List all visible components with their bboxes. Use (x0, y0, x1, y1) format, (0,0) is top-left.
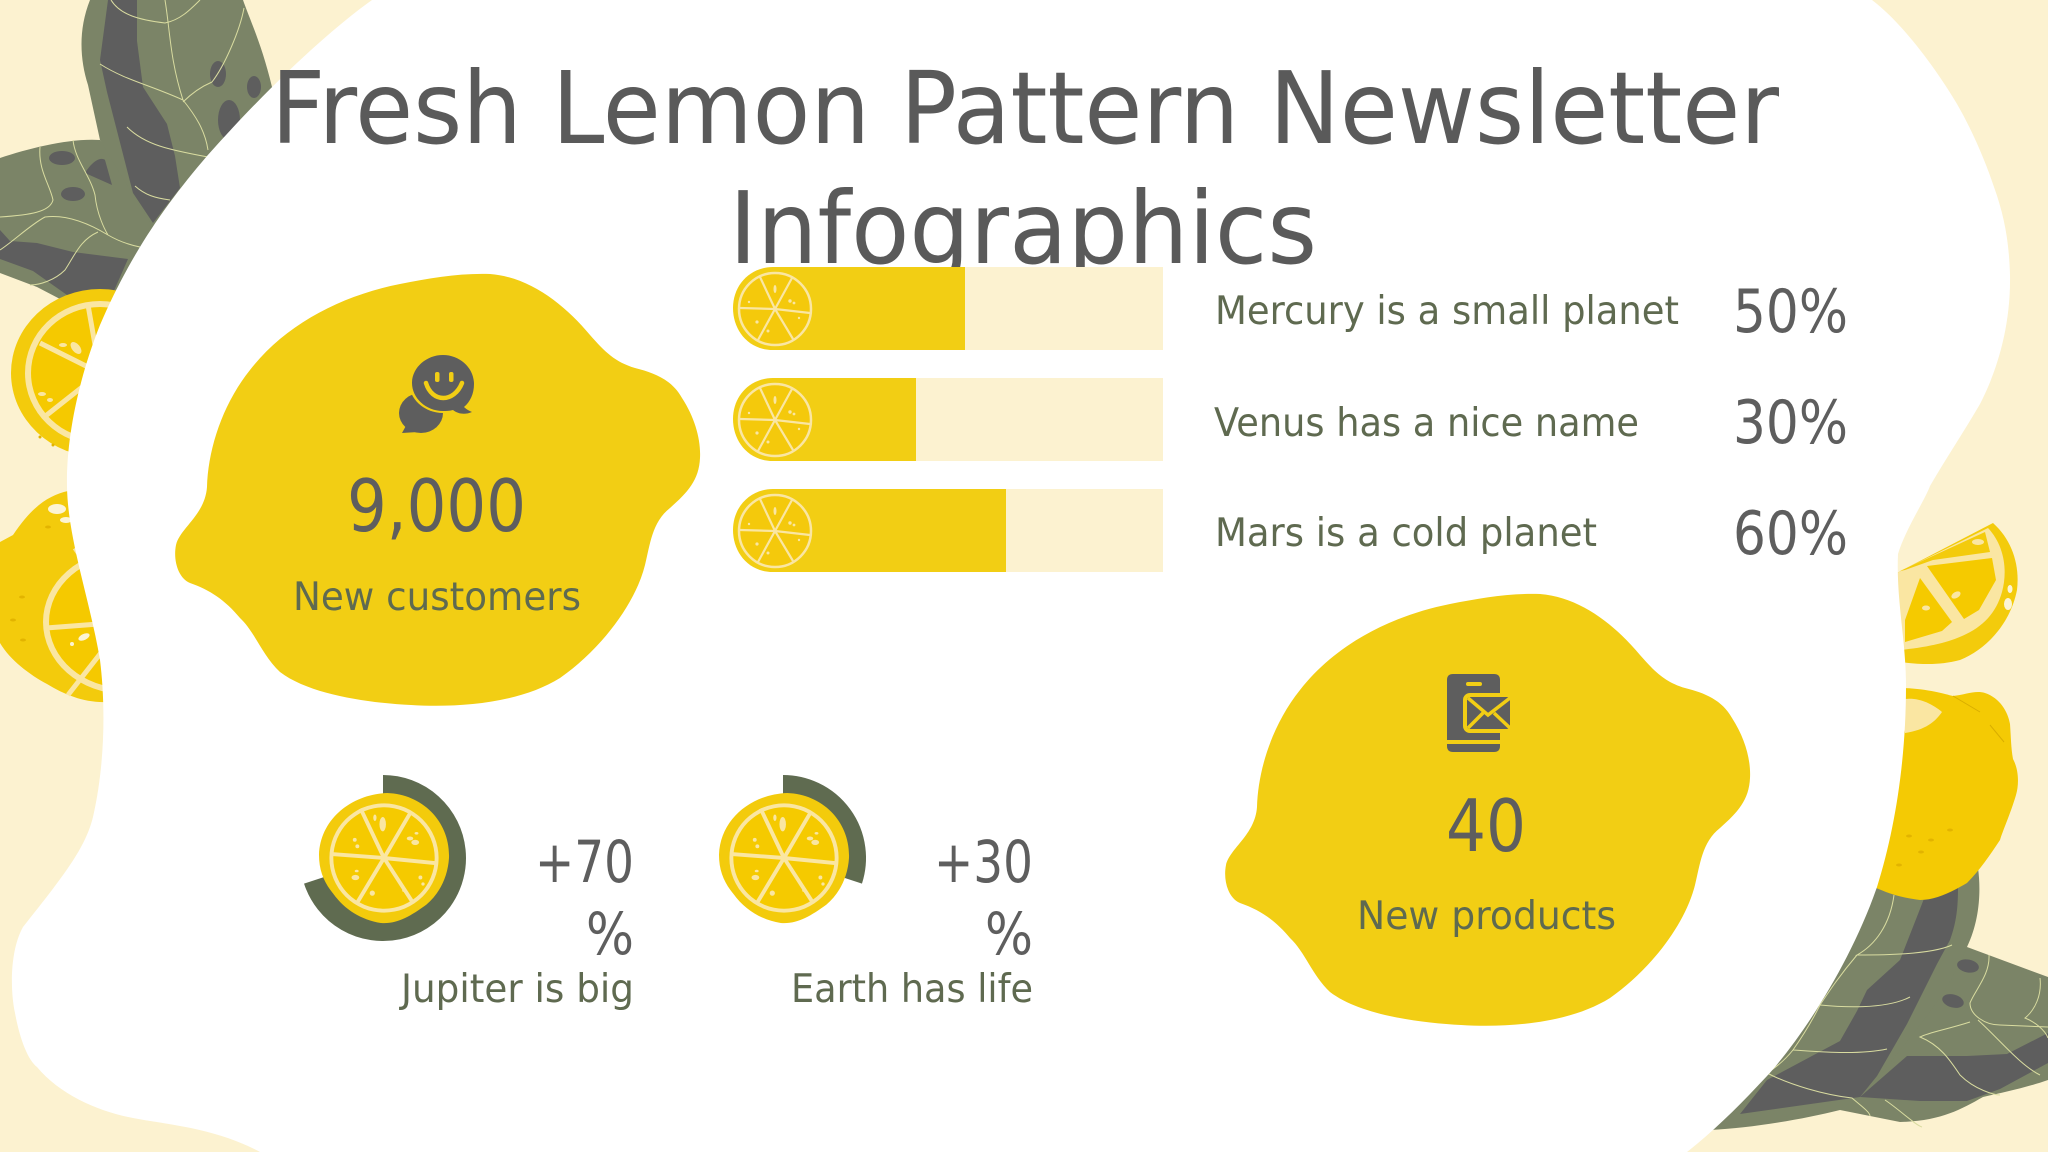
donut: Jupiter 70% (314, 786, 634, 1012)
bar row: Venus 30% (733, 378, 1848, 461)
bar row: Mars 60% (733, 489, 1848, 572)
panel: new customers lemon (175, 274, 700, 706)
icon: smiling chat bubbles (399, 351, 477, 433)
donut: Earth 30% (719, 786, 1033, 1012)
label: Mercury: Mercury is a small planet (1215, 289, 1679, 334)
value: 50%: 50% (1733, 277, 1848, 347)
value: 30%: 30% (1733, 388, 1848, 458)
label: Jupiter: Jupiter is big (398, 967, 634, 1012)
half lemon slice, right (1895, 523, 2018, 664)
top-left lemon leaves (0, 0, 300, 299)
value: 60%: 60% (1733, 499, 1848, 569)
title (280, 67, 1779, 267)
bottom-right lemon leaves (1710, 868, 2048, 1130)
label: Earth: Earth has life (791, 967, 1033, 1012)
title: Infographics (729, 170, 1317, 287)
label: Venus: Venus has a nice name (1214, 401, 1639, 446)
label: new products: New products (1357, 894, 1616, 939)
value: percent sign: % (985, 900, 1033, 968)
panel: new products lemon (1225, 594, 1750, 1026)
lemon slice, left (11, 289, 189, 457)
label: new customers: New customers (293, 575, 581, 620)
half lemon, left (0, 490, 207, 702)
value: +30: +30 (934, 828, 1033, 896)
icon: phone with envelope (1447, 674, 1512, 752)
value: percent sign: % (586, 900, 634, 968)
whole lemon, right (1870, 688, 2018, 900)
value: 40: 40 (1446, 784, 1526, 868)
value: +70: +70 (535, 828, 634, 896)
title: Fresh Lemon Pattern Newsletter (271, 50, 1780, 167)
value: 9,000: 9,000 (347, 464, 526, 548)
label: Mars: Mars is a cold planet (1215, 511, 1597, 556)
bar row: Mercury 50% (733, 267, 1848, 350)
